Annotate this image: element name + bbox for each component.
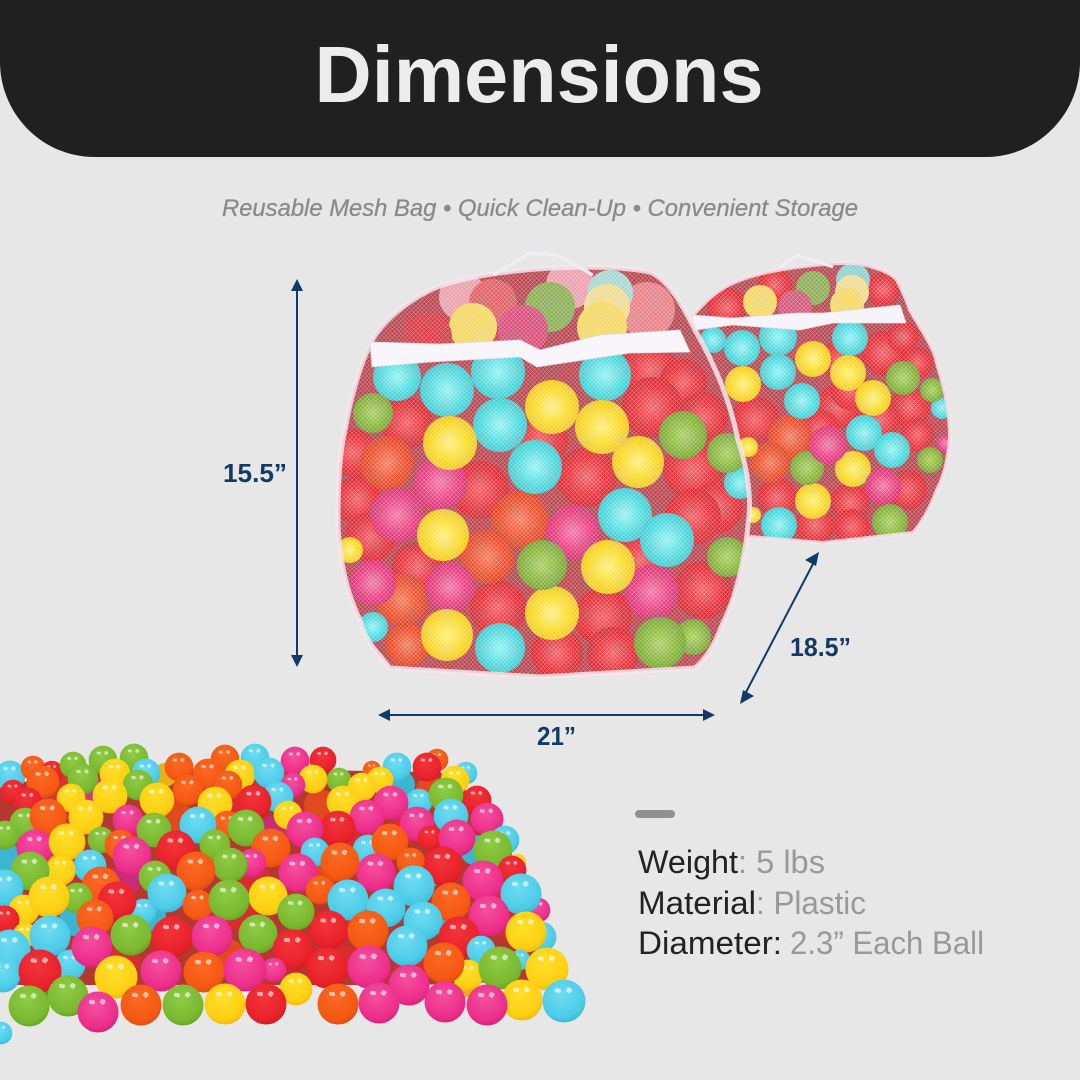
spec: material: : Plastic: [756, 885, 866, 921]
spec: diameter: 2.3” Each Ball: [790, 925, 984, 961]
label 18.5 inches: 18.5”: [790, 634, 851, 662]
ball pile photo: [0, 744, 586, 1044]
label 15.5 inches: 15.5”: [223, 460, 287, 488]
height arrow 15.5: [291, 279, 303, 667]
title banner: [0, 0, 1080, 157]
specs dash: [635, 810, 675, 818]
front bag handle: [493, 253, 593, 275]
spec: weight: Weight: [638, 844, 738, 880]
spec: material: Material: [638, 885, 756, 921]
front mesh bag: [329, 253, 760, 680]
rear bag handle: [780, 255, 833, 267]
spec: weight: [638, 844, 825, 880]
title: Dimensions: Dimensions: [314, 30, 764, 119]
front bag zipper band: [370, 330, 690, 367]
spec: material: [638, 885, 866, 921]
subtitle: Reusable Mesh Bag • Quick Clean-Up • Convenient Storage: [222, 195, 858, 222]
rear mesh bag: [690, 255, 960, 550]
width arrow 21: [378, 709, 715, 721]
label 21 inches: 21”: [537, 723, 576, 751]
depth arrow 18.5: [740, 552, 819, 704]
spec: diameter: [638, 925, 984, 961]
spec: weight: : 5 lbs: [738, 844, 825, 880]
spec: diameter: Diameter:: [638, 925, 782, 961]
rear bag zipper band: [692, 305, 906, 330]
